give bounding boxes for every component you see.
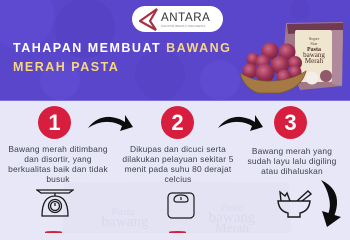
product illustration: shallots and pouch xyxy=(240,22,343,94)
step 2 text: Dikupas dan dicuci serta xyxy=(130,144,226,154)
step 3 text: atau dihaluskan xyxy=(261,166,323,176)
step 2 number xyxy=(161,106,194,139)
logo mark xyxy=(139,8,158,31)
step 2 text: menit pada suhu 80 derajat xyxy=(125,164,231,174)
watermark pouch right: Pasta xyxy=(220,203,243,214)
step 1 text: berkualitas baik dan tidak xyxy=(8,164,108,174)
step 2 text: dilakukan pelayuan sekitar 5 xyxy=(122,154,234,164)
logo tagline: KANTOR BERITA INDONESIA xyxy=(161,24,206,28)
arrow 3 to 4 xyxy=(321,180,341,227)
step 3 number: 3 xyxy=(284,110,297,135)
header band xyxy=(0,0,350,100)
pouch: Pasta xyxy=(307,47,321,53)
basket xyxy=(240,71,306,93)
pouch: Merah xyxy=(305,57,324,65)
step 1 text: Bawang merah ditimbang xyxy=(8,144,108,154)
shallots xyxy=(242,42,302,84)
divider strip xyxy=(0,100,350,101)
pouch: Super xyxy=(309,36,320,41)
watermark pouch left: Pasta xyxy=(111,207,134,218)
step 3 text xyxy=(247,146,337,176)
step 2 text xyxy=(122,144,234,184)
step 1 text: busuk xyxy=(46,174,70,184)
arrow 1 to 2 xyxy=(88,115,133,131)
step 1 number: 1 xyxy=(48,110,61,135)
icon: scale xyxy=(36,189,74,217)
title xyxy=(13,41,231,74)
logo wordmark: ANTARA xyxy=(161,12,210,24)
step 1 text xyxy=(8,144,108,184)
logo pill xyxy=(132,6,223,32)
title: MERAH PASTA xyxy=(13,60,119,74)
step 2 number: 2 xyxy=(171,110,184,135)
step 3 text: Bawang merah yang xyxy=(252,146,332,156)
step 5 number (cropped) xyxy=(169,231,186,233)
title: TAHAPAN MEMBUAT BAWANG xyxy=(13,41,231,55)
watermark pouch right xyxy=(208,203,256,233)
watermark pouch right: bawang xyxy=(209,210,256,226)
watermark pouch left xyxy=(102,207,149,230)
step 1 number xyxy=(38,106,71,139)
arrow 2 to 3 xyxy=(218,115,263,131)
icon: weighing scale xyxy=(167,192,195,219)
step 3 number xyxy=(274,106,307,139)
step 2 text: celcius xyxy=(164,174,192,184)
pouch xyxy=(284,22,343,90)
step 3 text: sudah layu lalu digiling xyxy=(247,156,337,166)
pouch: bawang xyxy=(303,51,325,59)
watermark pouch left: bawang xyxy=(102,214,149,230)
step 4 number (cropped) xyxy=(45,231,62,233)
step 1 text: dan disortir, yang xyxy=(24,154,92,164)
pouch: Star xyxy=(310,41,318,46)
icon: mortar and pestle xyxy=(277,190,312,218)
